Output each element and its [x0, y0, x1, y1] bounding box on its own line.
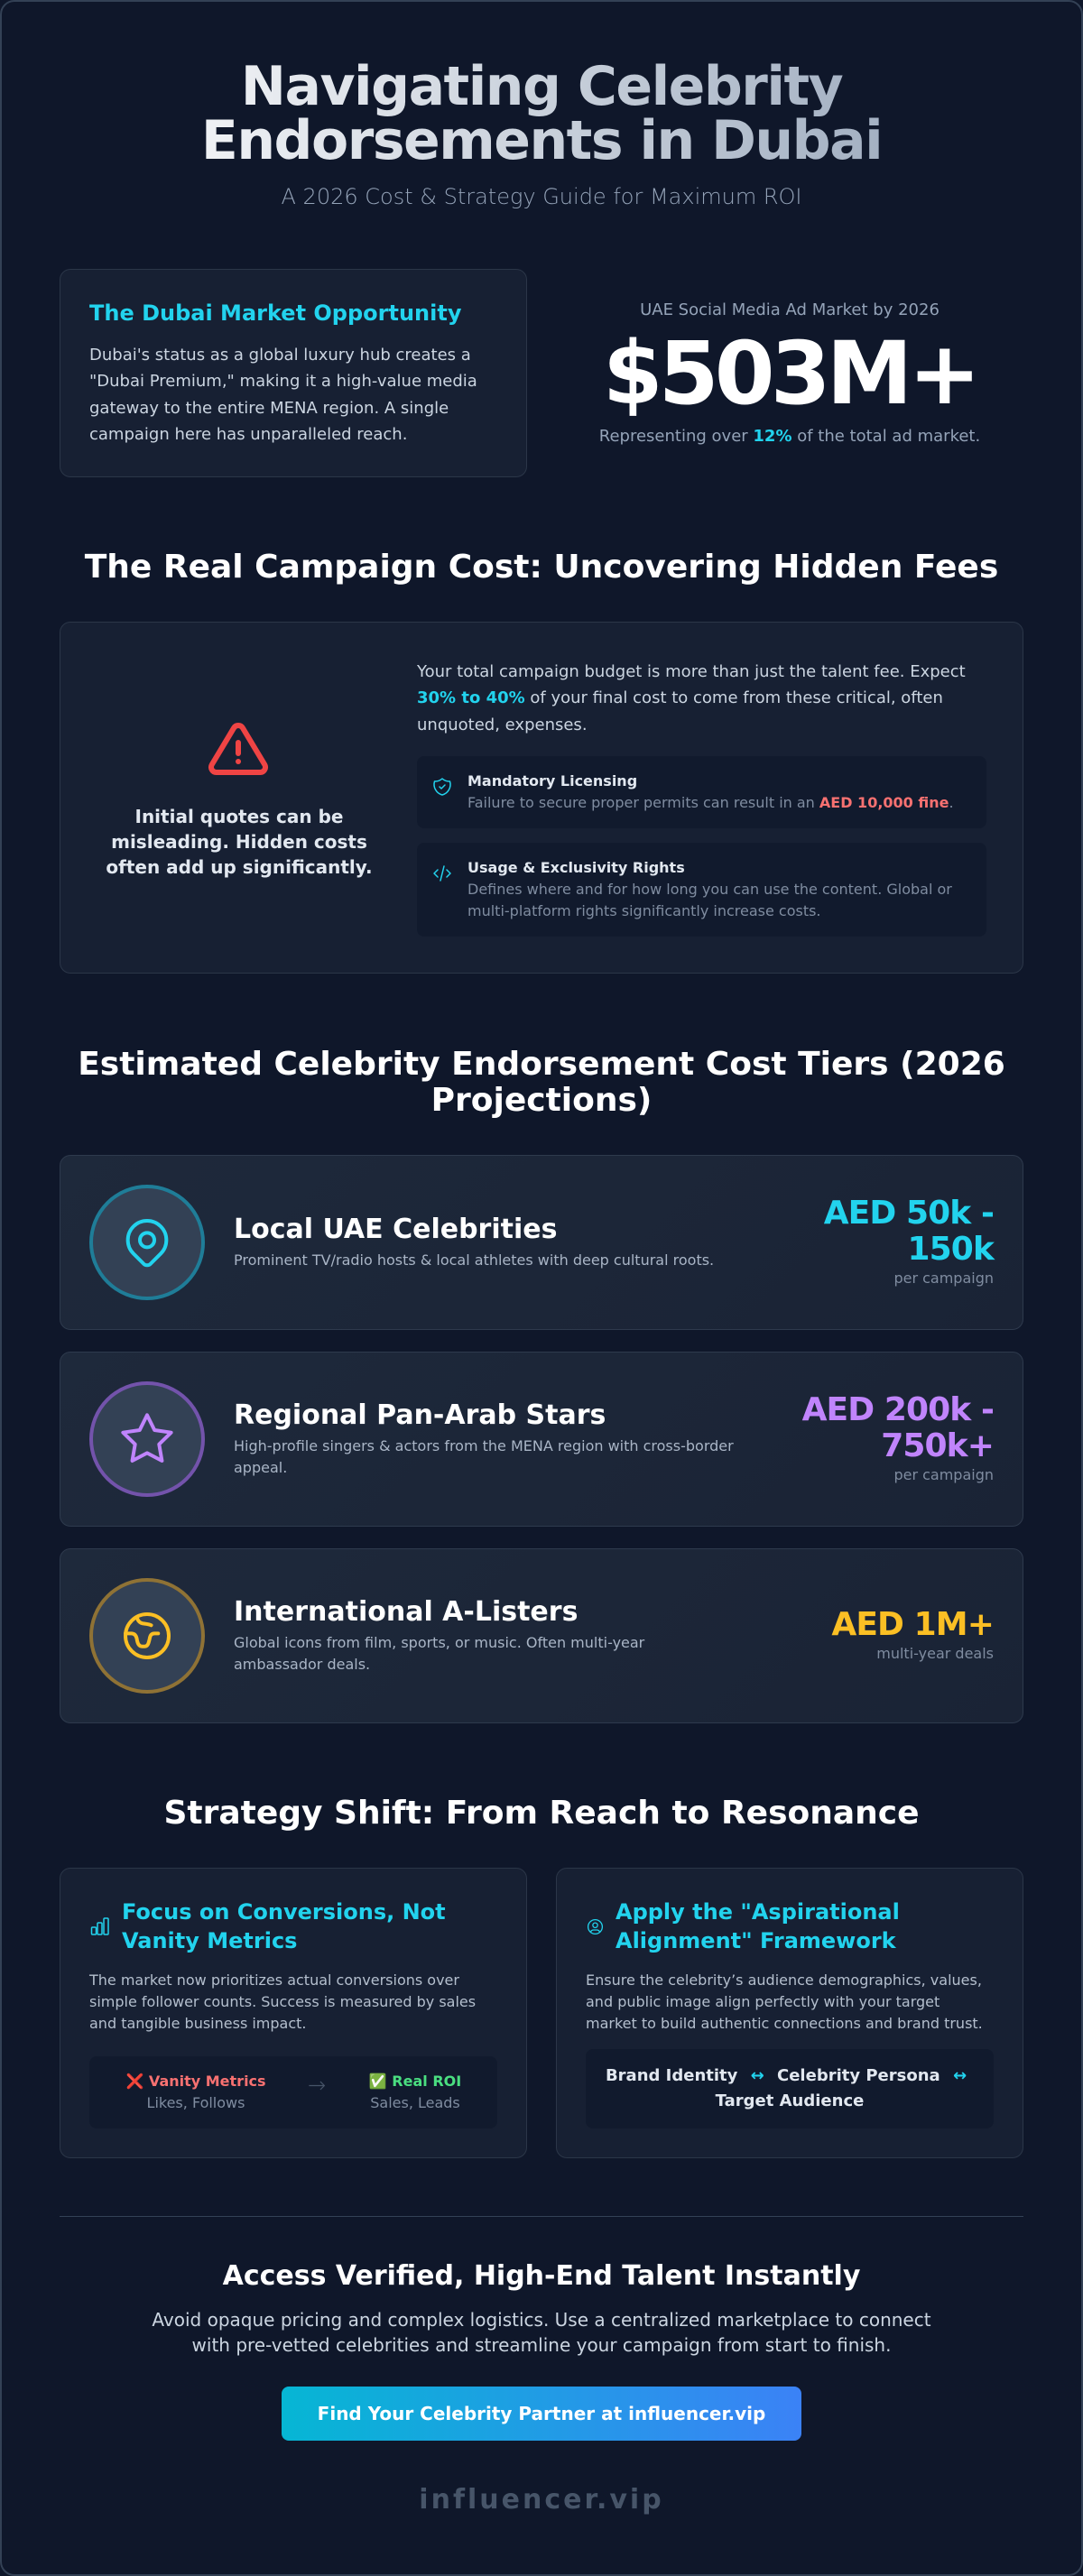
- stat: ad market size: [599, 300, 980, 446]
- item: mandatory licensing: [417, 756, 986, 828]
- tier price: 750k+: [881, 1427, 994, 1464]
- panel: dubai market opportunity: [60, 269, 527, 477]
- panel text: The market now prioritizes actual conversions over: [89, 1971, 459, 1989]
- divider: [60, 2216, 1023, 2217]
- stat label: UAE Social Media Ad Market by 2026: [640, 300, 940, 319]
- footer brand: influencer.vip: [419, 2484, 664, 2516]
- stat caption: Representing over 12% of the total ad market.: [599, 427, 980, 446]
- panel text: Dubai's status as a global luxury hub creates a: [89, 346, 471, 365]
- tier text: Prominent TV/radio hosts & local athletes with deep cultural roots.: [234, 1251, 714, 1269]
- tier text: [234, 1634, 644, 1673]
- tier text: High-profile singers & actors from the MENA region with cross-border: [234, 1437, 734, 1454]
- real roi: ✅ Real ROI: [369, 2073, 461, 2090]
- heading: strategy shift: Strategy Shift: From Reach to Resonance: [163, 1795, 920, 1832]
- vanity metrics: ❌ Vanity Metrics: [125, 2073, 266, 2090]
- subtitle: A 2026 Cost & Strategy Guide for Maximum ROI: [282, 184, 801, 209]
- icon: shield: [433, 778, 451, 796]
- warning text: [106, 806, 373, 878]
- panel: tier local: [60, 1155, 1023, 1330]
- cta button: [282, 2387, 801, 2441]
- tier price: AED 1M+: [831, 1606, 994, 1643]
- framework box: Target Audience: [716, 2091, 864, 2110]
- panel text: campaign here has unparalleled reach.: [89, 425, 407, 444]
- panel: hidden fees: [60, 622, 1023, 974]
- real roi: Sales, Leads: [370, 2094, 460, 2111]
- heading: cost tiers: Estimated Celebrity Endorsement Cost Tiers (2026: [78, 1046, 1005, 1083]
- item text: [467, 881, 952, 919]
- tier title: International A-Listers: [234, 1596, 578, 1628]
- framework box: Brand Identity ↔ Celebrity Persona ↔: [606, 2066, 967, 2085]
- panel text: gateway to the entire MENA region. A single: [89, 399, 449, 417]
- panel text: and public image align perfectly with your target: [586, 1993, 940, 2010]
- tier price: [824, 1195, 995, 1268]
- panel heading: [122, 1899, 446, 1953]
- icon: globe: [89, 1578, 205, 1694]
- framework box: [586, 2049, 994, 2128]
- icon: user circle: [588, 1919, 603, 1934]
- tier price: AED 50k -: [824, 1195, 994, 1232]
- cta text: [152, 2309, 931, 2356]
- vanity metrics: [125, 2073, 266, 2111]
- icon: warning triangle: [208, 723, 269, 775]
- item text: multi-platform rights significantly increase costs.: [467, 902, 821, 919]
- warning text: misleading. Hidden costs: [111, 831, 367, 853]
- item text: Failure to secure proper permits can result in an AED 10,000 fine.: [467, 794, 954, 811]
- heading: hidden fees: The Real Campaign Cost: Uncovering Hidden Fees: [85, 549, 998, 586]
- heading: cost tiers: [78, 1046, 1005, 1119]
- warning text: often add up significantly.: [106, 856, 373, 878]
- icon: code: [433, 865, 451, 882]
- panel text: simple follower counts. Success is measured by sales: [89, 1993, 476, 2010]
- comparison box: [89, 2056, 497, 2128]
- price note: per campaign: [893, 1270, 994, 1287]
- arrow: →: [308, 2073, 326, 2098]
- tier text: Global icons from film, sports, or music. Often multi-year: [234, 1634, 644, 1651]
- panel text: Ensure the celebrity’s audience demographics, values,: [586, 1971, 982, 1989]
- intro text: Your total campaign budget is more than just the talent fee. Expect: [417, 662, 966, 681]
- cta button: Find Your Celebrity Partner at influencer.vip: [318, 2403, 765, 2424]
- cta text: Avoid opaque pricing and complex logistics. Use a centralized marketplace to connect: [152, 2309, 931, 2331]
- stat number: $503M+: [603, 323, 977, 424]
- tier title: Regional Pan-Arab Stars: [234, 1399, 606, 1431]
- warning text: Initial quotes can be: [135, 806, 343, 827]
- cta text: with pre-vetted celebrities and streamline your campaign from start to finish.: [192, 2334, 891, 2356]
- intro text: unquoted, expenses.: [417, 715, 588, 734]
- heading: cost tiers: Projections): [431, 1082, 652, 1119]
- panel heading: Apply the "Aspirational: [616, 1899, 900, 1925]
- tier title: Local UAE Celebrities: [234, 1214, 557, 1245]
- panel heading: [616, 1899, 900, 1953]
- tier text: appeal.: [234, 1459, 287, 1476]
- tier price: [801, 1391, 994, 1464]
- panel heading: Vanity Metrics: [122, 1928, 297, 1953]
- panel heading: Focus on Conversions, Not: [122, 1899, 446, 1925]
- title: [60, 60, 1023, 168]
- title: Navigating Celebrity: [241, 55, 842, 118]
- real roi: [369, 2073, 461, 2111]
- item title: Mandatory Licensing: [467, 772, 637, 789]
- panel text: [586, 1971, 983, 2032]
- icon: map pin: [89, 1185, 205, 1300]
- icon: bar chart: [90, 1917, 109, 1935]
- price note: multi-year deals: [876, 1645, 994, 1662]
- panel heading: The Dubai Market Opportunity: [89, 300, 461, 326]
- price note: per campaign: [893, 1466, 994, 1483]
- item title: Usage & Exclusivity Rights: [467, 859, 685, 876]
- icon: star: [89, 1381, 205, 1497]
- panel text: "Dubai Premium," making it a high-value media: [89, 372, 477, 391]
- cta heading: Access Verified, High-End Talent Instantly: [223, 2260, 860, 2292]
- panel: tier regional: [60, 1352, 1023, 1527]
- intro text: 30% to 40% of your final cost to come from these critical, often: [417, 688, 943, 707]
- panel text: market to build authentic connections and brand trust.: [586, 2015, 983, 2032]
- panel text: [89, 346, 477, 444]
- intro text: [417, 662, 966, 734]
- panel heading: Alignment" Framework: [616, 1928, 896, 1953]
- item text: Defines where and for how long you can use the content. Global or: [467, 881, 952, 898]
- panel: tier international: [60, 1548, 1023, 1723]
- tier price: AED 200k -: [802, 1391, 994, 1428]
- vanity metrics: Likes, Follows: [147, 2094, 245, 2111]
- tier text: ambassador deals.: [234, 1656, 370, 1673]
- tier text: [234, 1437, 734, 1476]
- tier price: 150k: [908, 1231, 994, 1268]
- item: usage rights: [417, 843, 986, 937]
- panel: aspirational alignment: [556, 1868, 1023, 2158]
- panel text: [88, 1971, 476, 2032]
- panel: conversions: [60, 1868, 527, 2158]
- title: Endorsements in Dubai: [201, 109, 882, 172]
- panel text: and tangible business impact.: [89, 2015, 307, 2032]
